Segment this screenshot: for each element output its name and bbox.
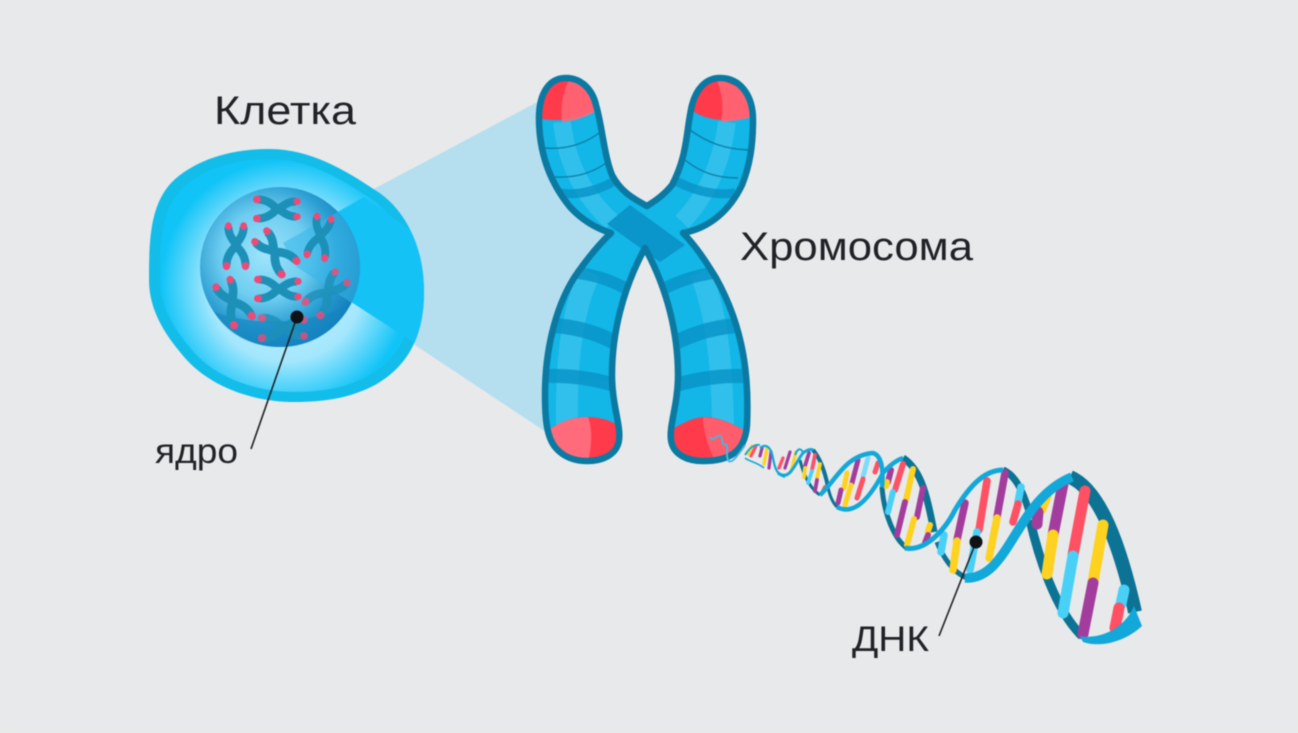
centromere band [607, 205, 685, 262]
label: DNA: ДНК [852, 620, 930, 659]
base pairs: third turn [886, 464, 930, 545]
nucleus [200, 186, 360, 348]
chromosome outline [539, 78, 753, 461]
cell membrane [149, 149, 424, 402]
base pairs: fifth turn [804, 453, 825, 491]
telomere caps [541, 80, 594, 121]
thin bands [545, 130, 748, 178]
label: chromosome: Хромосома [740, 225, 974, 269]
label: cell: Клетка [214, 89, 357, 133]
base pairs: second turn [941, 473, 1021, 570]
chromosome [530, 60, 760, 470]
small chromosomes in nucleus [209, 196, 354, 342]
chromosome body [539, 78, 753, 461]
base pairs: large turn [1037, 484, 1124, 634]
beam inside cell [338, 197, 424, 342]
DNA end ribbon [1080, 606, 1142, 644]
back strands [800, 450, 1135, 636]
label: nucleus: ядро [155, 432, 238, 471]
DNA tail scribble [710, 436, 745, 462]
cytoplasm [160, 159, 413, 392]
base pairs: small turns [748, 446, 796, 472]
front strands [745, 445, 1072, 578]
dark bands [540, 178, 750, 386]
lower nucleus shade [214, 304, 351, 347]
base pairs: fourth turn [838, 458, 878, 505]
DNA helix [710, 436, 1142, 644]
zoom beam from nucleus to chromosome [372, 98, 610, 436]
cell [149, 149, 424, 402]
highlights [562, 122, 612, 222]
DNA pointer [939, 536, 982, 636]
nucleus pointer [251, 310, 304, 449]
